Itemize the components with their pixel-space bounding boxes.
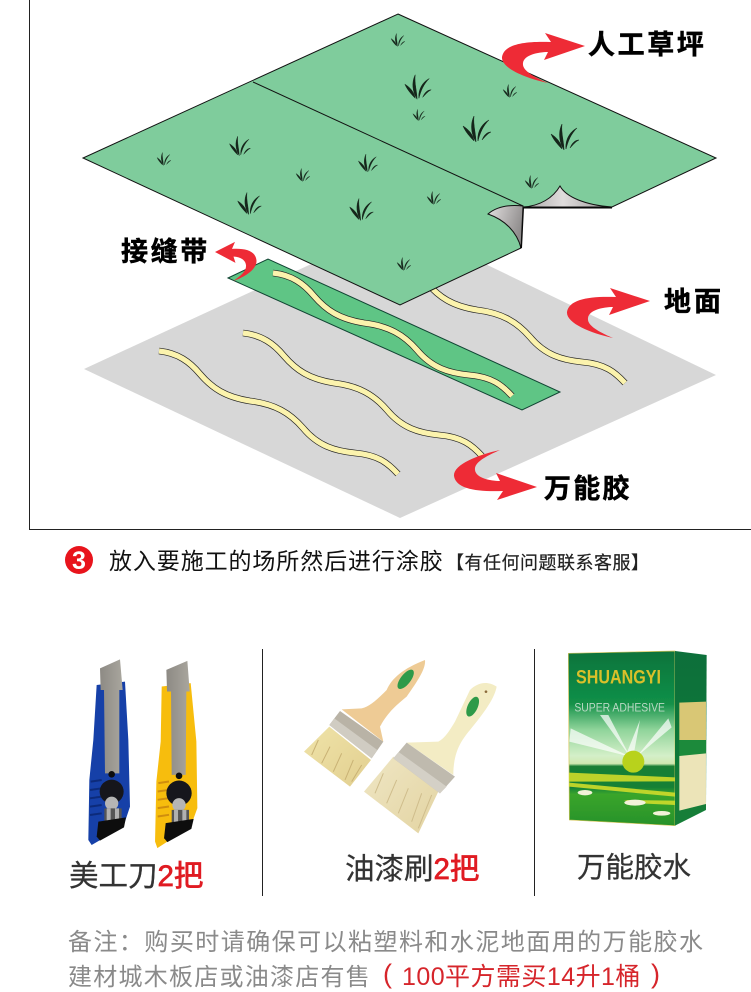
label: paint brushes: 油漆刷2把 [345,853,479,886]
seam tape strip [228,259,560,410]
note quantity text: 100平方需买14升1桶 [402,963,641,991]
arrow: turf [502,33,585,83]
glue line on seam tape [273,273,512,396]
turf seam line [253,82,523,206]
box side [675,651,707,826]
product text: SUPER ADHESIVE [574,701,665,715]
label: utility knives: 美工刀2把 [69,860,203,893]
divider right [534,649,536,896]
icon: glue box [568,651,707,826]
note closing bracket: ) [651,959,660,989]
label: seam tape: 接缝带 [121,237,210,267]
panel frame [30,0,751,530]
flowers [578,790,670,816]
divider left [262,649,264,896]
icon: dark wood paint brush [304,660,425,787]
curled turf corner right [523,186,612,207]
side label [679,702,706,740]
note line 1: 备注：购买时请确保可以粘塑料和水泥地面用的万能胶水 [68,929,703,956]
glue line 4 [386,260,625,383]
step number: 3 [72,547,86,575]
label: ground: 地面 [664,287,724,317]
curled turf corner left [488,205,523,248]
brand text: SHUANGYI [576,667,661,688]
ground layer [84,223,716,518]
grass tufts [157,34,579,270]
note quantity: ( [383,959,392,989]
step text: 放入要施工的场所然后进行涂胶 [109,548,444,574]
note block [68,929,703,991]
icon: pale wood paint brush [364,683,497,833]
label: universal glue: 万能胶 [544,474,632,504]
box front [568,651,675,826]
arrow: glue [454,450,537,500]
glue line 2 [243,333,482,456]
arrow: ground [567,288,650,338]
light rays [569,715,672,757]
notch edge [521,208,612,248]
arrow: seam tape [215,242,257,281]
step 3 caption [65,546,650,575]
contact note: 【有任何问题联系客服】 [446,553,650,573]
label: universal glue product: 万能胶水 [577,852,691,884]
icon: yellow utility knife [155,661,197,848]
glue line 1 [159,351,398,474]
diagram panel: turf installation layers [30,0,751,530]
icon: blue utility knife [88,659,130,845]
label: artificial turf: 人工草坪 [588,30,706,60]
note line 2: 建材城木板店或油漆店有售 [68,964,371,991]
field bands [569,773,675,805]
artificial turf sheet [83,14,716,305]
step number badge [65,546,93,574]
sun [622,751,644,773]
